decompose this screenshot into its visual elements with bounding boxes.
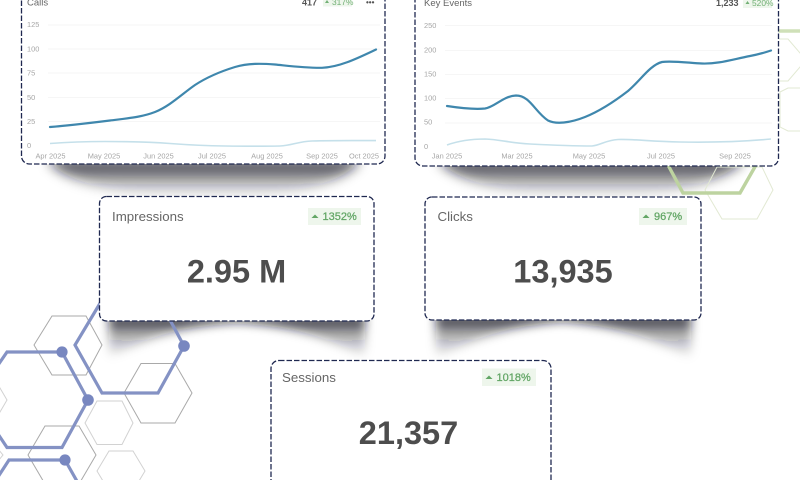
value: 2.95 M (187, 254, 286, 290)
y axis labels: 100 (424, 94, 436, 102)
x axis labels: Jul 2025 (647, 152, 675, 160)
y axis labels: 250 (424, 21, 436, 30)
value: 13,935 (513, 254, 613, 290)
label: Clicks (438, 209, 473, 224)
panel: impressions (100, 196, 374, 321)
card frame (415, 0, 778, 166)
change badge (308, 208, 361, 225)
y axis labels (27, 20, 39, 150)
card frame (425, 197, 701, 320)
gridlines (48, 25, 380, 122)
key events change badge (743, 0, 774, 8)
background hexagon network: blue (0, 300, 192, 480)
x axis labels: May 2025 (573, 152, 605, 160)
label: Impressions (112, 209, 184, 224)
panel: clicks (425, 197, 701, 320)
calls change badge (323, 0, 354, 7)
panel: calls chart (22, 0, 385, 164)
x axis labels: Aug 2025 (251, 152, 283, 160)
change badge (639, 208, 687, 225)
y axis labels: 0 (424, 142, 428, 151)
panel: sessions (271, 360, 551, 480)
x axis labels (432, 152, 751, 160)
y axis labels: 100 (27, 44, 39, 54)
x axis labels: May 2025 (88, 152, 120, 160)
y axis labels: 125 (27, 20, 39, 29)
y axis labels: 50 (424, 118, 432, 126)
x axis labels: Mar 2025 (501, 152, 533, 160)
y axis labels: 150 (424, 70, 436, 78)
line: previous period (50, 141, 376, 146)
card frame (271, 360, 551, 480)
shadow: impressions card (109, 316, 365, 358)
x axis labels: Jan 2025 (432, 152, 462, 160)
gridlines (445, 26, 772, 123)
background hexagon network: green (668, 31, 800, 219)
y axis labels: 75 (27, 68, 35, 78)
value: 21,357 (359, 415, 458, 451)
x axis labels (36, 152, 379, 160)
shadow: key events chart (438, 160, 745, 196)
x axis labels: Jun 2025 (143, 152, 174, 160)
card frame (22, 0, 385, 164)
shadow: calls chart (48, 160, 360, 196)
line: previous period (447, 139, 771, 146)
x axis labels: Sep 2025 (719, 152, 751, 160)
panel: key events chart (415, 0, 778, 166)
x axis labels: Oct 2025 (349, 152, 379, 160)
card frame (100, 196, 374, 321)
change badge: 1352% (322, 211, 357, 223)
x axis labels: Sep 2025 (306, 152, 338, 160)
line: current period (50, 50, 376, 127)
change badge: 967% (654, 211, 682, 223)
label: Sessions (282, 370, 336, 385)
shadow: clicks card (436, 315, 691, 358)
y axis labels: 25 (27, 117, 35, 126)
line: current period (447, 50, 771, 123)
y axis labels (424, 21, 436, 151)
y axis labels: 50 (27, 93, 35, 102)
x axis labels: Apr 2025 (36, 152, 66, 160)
y axis labels: 0 (27, 141, 31, 150)
change badge: 1018% (496, 372, 531, 384)
change badge (482, 368, 536, 386)
x axis labels: Jul 2025 (198, 152, 226, 160)
y axis labels: 200 (424, 46, 436, 54)
